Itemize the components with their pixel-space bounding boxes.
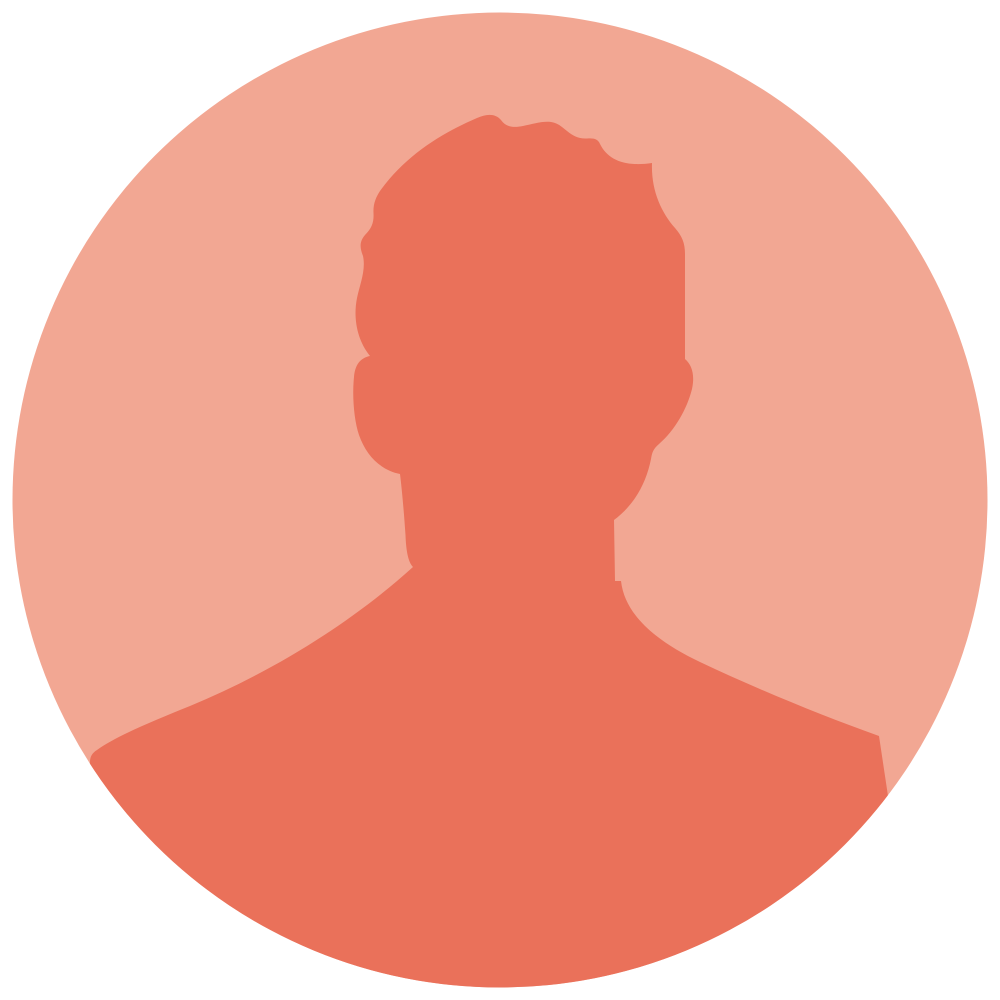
person silhouette (60, 115, 888, 1000)
